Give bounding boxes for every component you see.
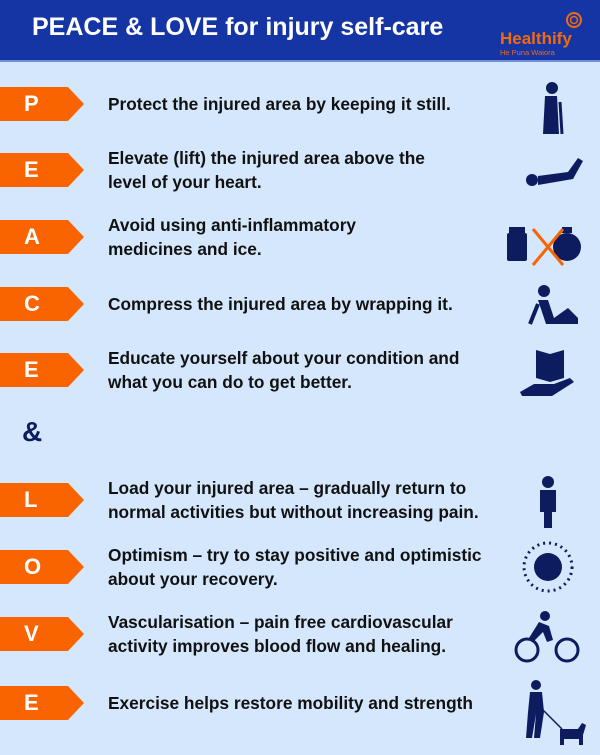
tag P [0,87,84,121]
tag E [0,353,84,387]
icon: person lying with leg raised [526,158,583,186]
text E: level of your heart. [108,172,262,192]
text V [108,612,453,656]
text E: Elevate (lift) the injured area above the [108,148,425,168]
ampersand: & [22,416,42,447]
text E [108,348,459,392]
row C [0,285,578,325]
text E [108,148,425,192]
text O: Optimism – try to stay positive and optimistic [108,545,482,565]
logo: Healthify [500,12,582,57]
text O: about your recovery. [108,569,278,589]
text E: what you can do to get better. [108,372,352,392]
row P [0,82,564,134]
tag P: P [24,91,39,116]
tag L: L [24,487,37,512]
tag A [0,220,84,254]
icon: sun [522,542,574,592]
logo: Healthify: He Puna Waiora [500,48,556,57]
text V: Vascularisation – pain free cardiovascular [108,612,453,632]
logo: Healthify: Healthify [500,29,572,48]
text O [108,545,482,589]
text V: activity improves blood flow and healing. [108,636,446,656]
text A: Avoid using anti-inflammatory [108,215,356,235]
tag L [0,483,84,517]
text E: Exercise helps restore mobility and strength [108,693,473,713]
icon: cyclist [514,611,580,662]
text L [108,478,479,522]
icon: seated person with wrapped leg [528,285,578,325]
tag V [0,617,84,651]
text E: Educate yourself about your condition and [108,348,459,368]
row E2 [0,348,574,396]
text L: normal activities but without increasing pain. [108,502,479,522]
text A: medicines and ice. [108,239,262,259]
tag A: A [24,224,40,249]
row E3 [0,680,586,745]
icon: standing person [540,476,556,528]
row V [0,611,580,662]
icon: book on hand [520,350,574,396]
icon: medicine and ice crossed out [507,227,581,266]
tag E: E [24,357,39,382]
text A [108,215,356,259]
row O [0,542,574,592]
tag C: C [24,291,40,316]
icon: person walking dog [526,680,586,745]
row E [0,148,583,192]
title: PEACE & LOVE for injury self-care [32,13,443,41]
text P: Protect the injured area by keeping it still. [108,94,451,114]
tag O [0,550,84,584]
row L [0,476,556,528]
header [0,0,600,62]
icon: person with crutch [543,82,564,134]
tag C [0,287,84,321]
text C: Compress the injured area by wrapping it. [108,294,453,314]
row A [0,215,581,266]
tag E [0,153,84,187]
tag E [0,686,84,720]
tag O: O [24,554,41,579]
tag V: V [24,621,39,646]
tag E: E [24,157,39,182]
tag E: E [24,690,39,715]
text L: Load your injured area – gradually return to [108,478,466,498]
